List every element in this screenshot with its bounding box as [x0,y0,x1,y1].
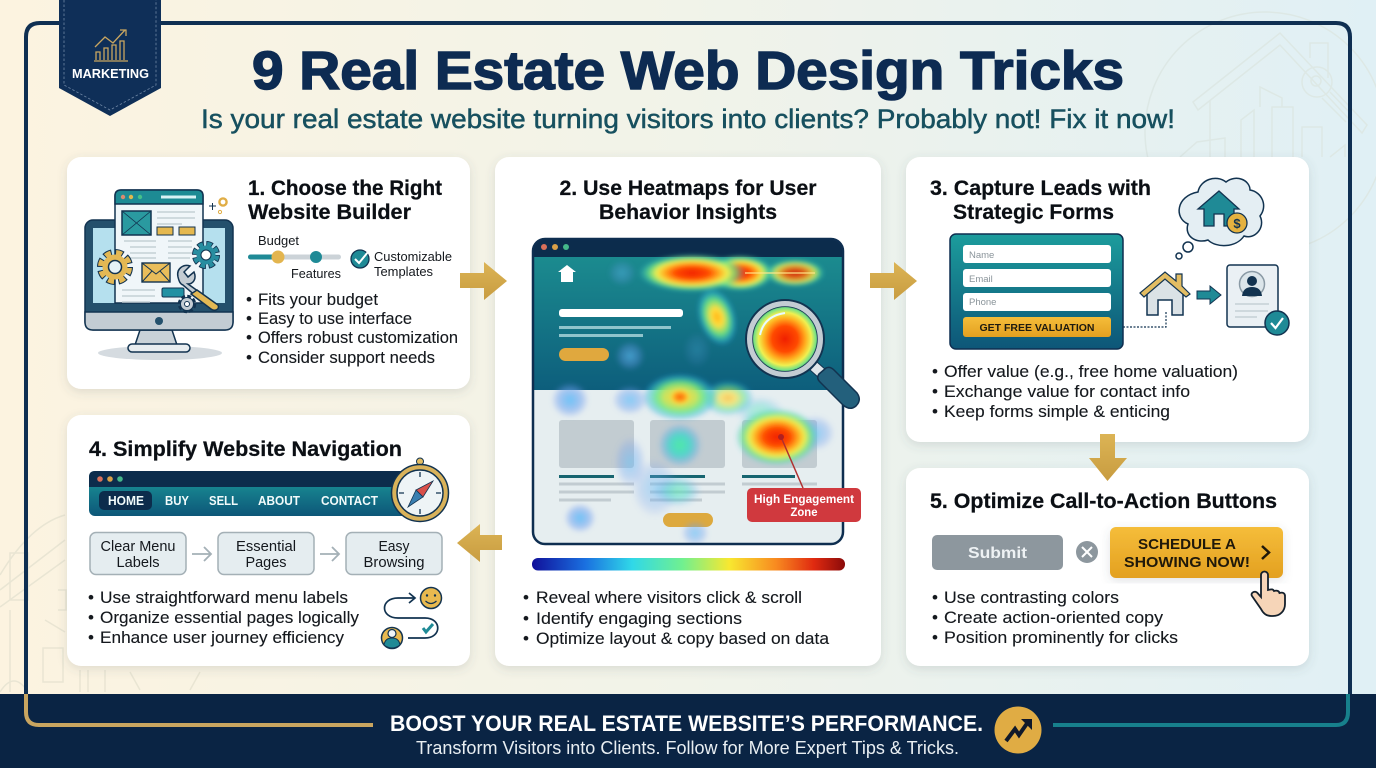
customizable templates [351,250,452,279]
icon: magnifier [745,299,859,408]
heat colour scale [532,558,845,570]
flow: clear menu labels [90,532,186,574]
slider: budget and features: Features [291,267,341,281]
flow: clear menu labels: Clear Menu [100,539,176,555]
bullet list: • [246,309,252,328]
bullet list: • [523,588,529,607]
bullet list: Consider support needs [258,348,435,367]
bullet list: • [932,608,938,627]
heading: Behavior Insights [599,200,777,224]
bullet list: Create action-oriented copy [944,608,1164,627]
lead form [950,234,1123,349]
lead form: GET FREE VALUATION [980,322,1094,334]
flow: essential pages: Essential [236,539,296,555]
flow: essential pages: Pages [246,555,286,571]
icon: teal gear [195,244,217,266]
slider: budget and features: Budget [258,234,300,248]
bullet list: • [88,608,94,627]
flow: easy browsing [346,532,442,574]
bullet list: • [88,628,94,647]
icon: compass [392,458,448,522]
bullet list: • [932,382,938,401]
heading: Strategic Forms [953,200,1114,224]
arrow: house to contact [1197,286,1221,304]
callout: high engagement zone: Zone [790,507,818,519]
orange call-to-action button [1110,527,1283,578]
slider: budget and features [248,234,341,281]
bullet list [523,588,830,648]
bullet list [246,290,458,367]
bullet list: • [523,609,529,628]
background line art: city [0,515,200,692]
heading: 1. Choose the Right [248,176,442,200]
bullet list: • [246,348,252,367]
ribbon badge: marketing: MARKETING [72,67,149,81]
heading: 4. Simplify Website Navigation [89,437,402,461]
arrow [192,547,211,561]
icon: thought cloud with house: $ [1233,216,1241,231]
lead form: Email [969,274,993,285]
arrow: step 1 to 2 [460,262,507,300]
panel: 3 capture leads [906,157,1309,442]
customizable templates: Customizable [374,250,452,264]
bullet list [932,588,1178,647]
bullet list: Keep forms simple & enticing [944,402,1170,421]
bullet list: • [932,588,938,607]
navigation bar: BUY [165,494,190,508]
footer text [390,711,983,758]
navigation bar: ABOUT [258,494,300,508]
bullet list: Identify engaging sections [536,609,742,628]
navigation bar [89,471,407,516]
heading: 2. Use Heatmaps for User [560,176,817,200]
bullet list [88,588,359,647]
heading [248,176,442,224]
icon: contact card [1227,265,1289,335]
navigation bar: HOME [108,494,144,508]
grey submit button: Submit [968,545,1028,562]
flow: easy browsing: Browsing [364,555,424,571]
panel: 5 optimize call-to-action [906,468,1309,666]
arrow [320,547,339,561]
ribbon badge: marketing [59,0,161,116]
icon: sparkle [209,198,227,214]
bullet list: • [932,362,938,381]
heading [560,176,817,224]
panel: 4 simplify navigation [67,415,470,666]
orange call-to-action button: SCHEDULE A [1138,536,1236,553]
flow: clear menu labels: Labels [116,555,160,571]
icon: growth chart [94,30,128,61]
callout: high engagement zone [747,434,861,522]
bullet list: Reveal where visitors click & scroll [536,588,802,607]
bullet list: Position prominently for clicks [944,628,1178,647]
bullet list: Exchange value for contact info [944,382,1190,401]
page wireframe [558,265,817,527]
arrow: step 2 to 3 [870,262,917,300]
footer band [0,694,1376,768]
bullet list: Offer value (e.g., free home valuation) [944,362,1238,381]
subtitle: Is your real estate website turning visitors into clients? Probably not! Fix it now! [201,104,1175,134]
lead form: Name [969,250,994,261]
callout: high engagement zone: High Engagement [754,494,854,506]
flow: easy browsing: Easy [378,539,410,555]
icon: thought cloud with house [1176,178,1264,259]
orange call-to-action button: SHOWING NOW! [1124,554,1250,571]
bullet list: Use straightforward menu labels [100,588,348,607]
bullet list: • [932,402,938,421]
footer text: BOOST YOUR REAL ESTATE WEBSITE’S PERFORMANCE. [390,711,983,736]
bullet list: Optimize layout & copy based on data [536,629,830,648]
heatmap browser window [533,239,861,546]
heading [930,176,1151,224]
icon: house [1140,272,1190,315]
navigation bar: SELL [209,494,238,508]
heading: 3. Capture Leads with [930,176,1151,200]
panel: 2 use heatmaps [495,157,881,666]
arrow: step 3 to 5 [1089,434,1127,481]
dashed connector [1123,312,1166,327]
title: 9 Real Estate Web Design Tricks [252,41,1124,101]
bullet list: Enhance user journey efficiency [100,628,344,647]
bullet list: • [88,588,94,607]
arrow: step 2 to 4 [457,524,502,562]
icon: wrench [178,265,218,310]
icon: gold gear [100,252,130,282]
bullet list: Organize essential pages logically [100,608,359,627]
bullet list: Use contrasting colors [944,588,1119,607]
icon: monitor with website and tools [85,190,233,360]
bullet list: • [246,328,252,347]
heading: Website Builder [248,200,412,224]
icon: pointing hand [1252,572,1285,616]
heading: 5. Optimize Call-to-Action Buttons [930,489,1277,513]
background line art: house and key [1145,12,1376,252]
lead form: Phone [969,297,996,308]
bullet list: Easy to use interface [258,309,412,328]
bullet list: Offers robust customization [258,328,458,347]
bullet list: • [523,629,529,648]
icon: growth coin [994,706,1042,754]
panel: 1 choose the right website builder [67,157,470,389]
bullet list: Fits your budget [258,290,378,309]
icon: small gear [180,297,194,311]
customizable templates: Templates [374,265,433,279]
bullet list: • [932,628,938,647]
bullet list [932,362,1238,421]
heat blobs [551,254,835,546]
icon: cross [1076,541,1098,563]
footer text: Transform Visitors into Clients. Follow for More Expert Tips & Tricks. [416,738,959,758]
bullet list: • [246,290,252,309]
icon: user journey [382,588,442,648]
navigation bar: CONTACT [321,494,378,508]
grey submit button [932,535,1063,570]
flow: essential pages [218,532,314,574]
